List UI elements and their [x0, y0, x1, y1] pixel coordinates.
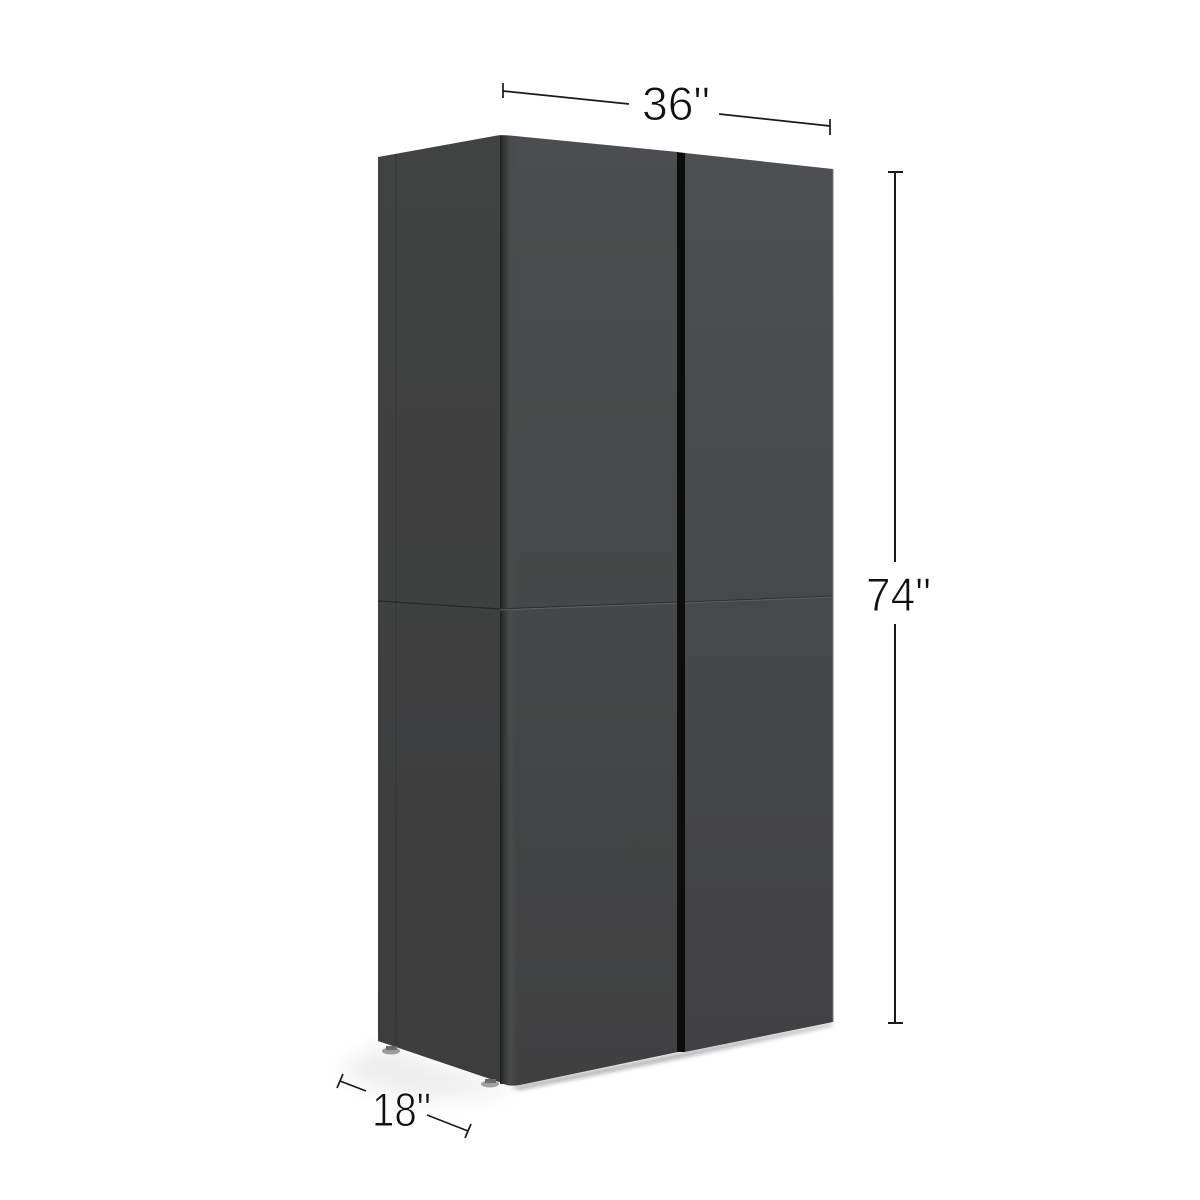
dimension: width 36 inches [503, 77, 830, 135]
dimension: depth 18 inches: 18" [372, 1083, 431, 1136]
floor shadow [335, 1023, 832, 1100]
left door [500, 135, 678, 1086]
adjustable foot, rear [382, 1046, 400, 1054]
door gap [677, 152, 685, 1052]
dimension: height 74 inches: 74" [866, 568, 931, 621]
cabinet [378, 135, 833, 1088]
dimension: depth 18 inches [337, 1074, 471, 1138]
adjustable foot, front [481, 1079, 499, 1088]
cabinet side panel [378, 135, 502, 1083]
right door [685, 153, 833, 1052]
dimension: width 36 inches: 36" [642, 77, 710, 130]
